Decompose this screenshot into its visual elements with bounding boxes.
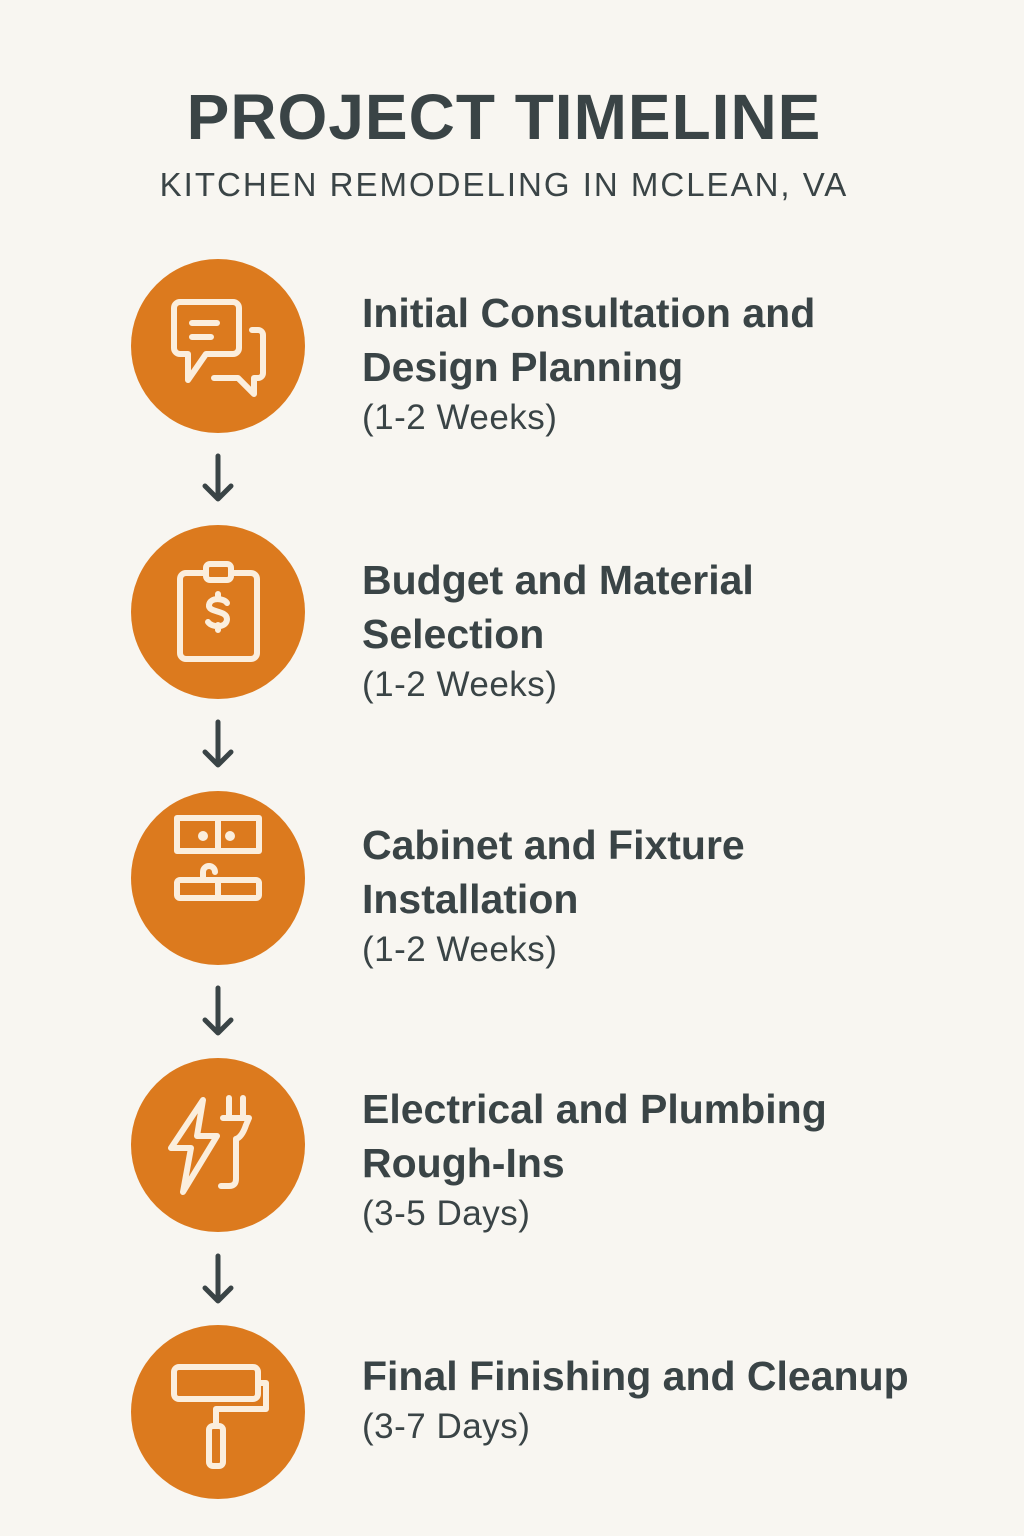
step 3 text: Cabinet and Fixture: [362, 822, 745, 868]
icon: cabinet and sink: [131, 791, 305, 965]
step 1 text: (1-2 Weeks): [362, 398, 557, 437]
step 2 text: Selection: [362, 611, 544, 657]
subtitle: KITCHEN REMODELING IN MCLEAN, VA: [160, 166, 848, 203]
icon: clipboard dollar: [131, 525, 305, 699]
arrow 3: [205, 988, 231, 1033]
step 2 text: [362, 557, 754, 704]
step 4 text: [362, 1086, 827, 1233]
step 2 text: Budget and Material: [362, 557, 754, 603]
icon: paint roller: [131, 1325, 305, 1499]
step 5 text: Final Finishing and Cleanup: [362, 1353, 909, 1399]
step 3 text: Installation: [362, 876, 578, 922]
step 1 text: Design Planning: [362, 344, 683, 390]
step 4 text: Rough-Ins: [362, 1140, 565, 1186]
title: PROJECT TIMELINE: [187, 81, 821, 153]
step 1 text: Initial Consultation and: [362, 290, 815, 336]
step 4 text: (3-5 Days): [362, 1194, 530, 1233]
step 5 text: [362, 1353, 909, 1446]
icon: chat bubbles: [131, 259, 305, 433]
icon: lightning and plug: [131, 1058, 305, 1232]
step 2 text: (1-2 Weeks): [362, 665, 557, 704]
step 5 text: (3-7 Days): [362, 1407, 530, 1446]
step 3 text: (1-2 Weeks): [362, 930, 557, 969]
step 1 text: [362, 290, 815, 437]
step 4 text: Electrical and Plumbing: [362, 1086, 827, 1132]
arrow 2: [205, 722, 231, 765]
arrow 1: [205, 456, 231, 499]
arrow 4: [205, 1256, 231, 1301]
step 3 text: [362, 822, 745, 969]
